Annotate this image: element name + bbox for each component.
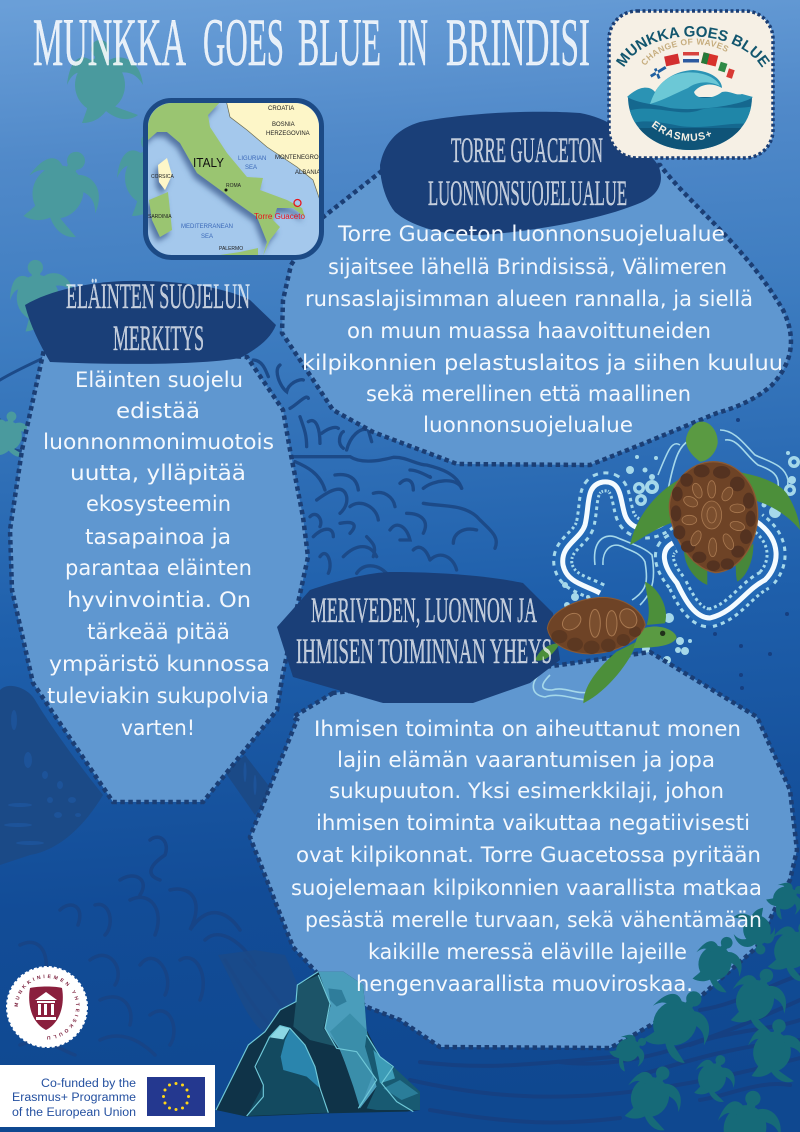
flippers	[630, 479, 680, 545]
background wave pattern	[253, 360, 496, 573]
text: ELÄINTEN SUOJELUN	[66, 276, 250, 316]
logo: Munkka Goes Blue badge: ERASMUS+	[652, 120, 712, 142]
map of Italy: MONTENEGRO	[275, 155, 319, 161]
heading blob: Eläinten suojelun	[25, 281, 276, 364]
text block: Ihmisen toiminta: hengenvaarallista muoviroskaa.	[356, 972, 693, 997]
EU co-funding box: of the European Union	[12, 1107, 136, 1119]
text block: Eläinten suojelu: edistää	[116, 399, 200, 424]
heading: Eläinten suojelun merkitys	[66, 276, 250, 358]
panel: Eläinten suojelun background	[10, 345, 308, 802]
text block: Eläinten suojelu: varten!	[121, 716, 195, 741]
text block: Eläinten suojelu: ympäristö kunnossa	[49, 652, 270, 677]
map of Italy: LIGURIAN	[238, 156, 266, 162]
text block: Torre Guaceton: runsaslajisimman alueen rannalla, ja siellä	[305, 287, 753, 312]
turtle silhouettes: upper left	[0, 40, 193, 461]
map of Italy: ALBANIA	[295, 170, 320, 176]
text block: Eläinten suojelu: ekosysteemin	[86, 492, 231, 517]
heading: Eläinten suojelun merkitys: MERKITYS	[113, 318, 204, 358]
logo: Munkka Goes Blue badge: CHANGE OF WAVES	[642, 38, 728, 65]
EU co-funding box	[0, 1065, 215, 1127]
logo: Munkka Goes Blue badge	[607, 9, 775, 160]
title	[33, 4, 590, 80]
panel: Meriveden background	[250, 652, 797, 1048]
map of Italy	[145, 100, 325, 260]
map of Italy: ROMA	[226, 183, 242, 189]
heading: Torre Guaceton	[428, 130, 627, 213]
text block: Torre Guaceton: sekä merellinen että maallinen	[366, 382, 691, 407]
heading: Meriveden, luonnon ja ihmisen toiminnan yhteys	[296, 590, 552, 671]
map of Italy: SEA	[201, 234, 213, 240]
text block: Torre Guaceton: kilpikonnien pelastuslaitos ja siihen kuuluu	[302, 351, 783, 376]
EU flag	[147, 1077, 205, 1116]
small turtle lines over panel	[533, 672, 590, 700]
logo wave	[628, 97, 752, 150]
EU co-funding box: Erasmus+ Programme	[12, 1092, 136, 1104]
map of Italy: SARDINIA	[148, 214, 172, 220]
heading: Meriveden, luonnon ja ihmisen toiminnan yhteys: MERIVEDEN, LUONNON JA	[311, 590, 537, 630]
map of Italy: Torre Guaceto	[254, 212, 306, 221]
decorative aboriginal dot lines	[563, 482, 776, 618]
rock	[216, 972, 420, 1117]
text block: Ihmisen toiminta: suojelemaan kilpikonnien vaarallista matkaa	[291, 876, 762, 901]
map of Italy: SEA	[245, 165, 257, 171]
text block: Torre Guaceton	[302, 222, 783, 438]
heading: Torre Guaceton: TORRE GUACETON	[451, 130, 603, 170]
text block: Ihmisen toiminta: kaikille meressä eläville lajeille	[368, 940, 687, 965]
text block: Eläinten suojelu: tärkeää pitää	[87, 620, 230, 645]
badge: Munkkiniemen yhteiskoulu: MUNKKINIEMEN YHTEISKOULU	[14, 974, 80, 1040]
map of Italy: MEDITERRANEAN	[181, 224, 233, 230]
text block: Torre Guaceton: sijaitsee lähellä Brindisissä, Välimeren	[328, 255, 727, 280]
dot clusters	[530, 451, 800, 673]
logo arc text: MUNKKA GOES BLUE	[616, 26, 770, 68]
text block: Eläinten suojelu: hyvinvointia. On	[67, 588, 251, 613]
EU co-funding box: Co-funded by the	[41, 1078, 136, 1090]
text block: Eläinten suojelu: tuleviakin sukupolvia	[47, 684, 269, 709]
text block: Eläinten suojelu	[43, 368, 274, 741]
text block: Torre Guaceton: luonnonsuojelualue	[423, 413, 633, 438]
rock-side ornament	[218, 950, 300, 1035]
text block: Ihmisen toiminta: ovat kilpikonnat. Torre Guacetossa pyritään	[296, 843, 761, 868]
text block: Ihmisen toiminta: sukupuuton. Yksi esimerkkilaji, johon	[329, 779, 724, 804]
title: IN	[398, 4, 428, 80]
text block: Eläinten suojelu: uutta, ylläpitää	[70, 461, 246, 486]
text: BRINDISI	[446, 4, 590, 80]
panel: Torre Guaceto background	[282, 165, 791, 465]
text block: Ihmisen toiminta	[291, 717, 762, 997]
big turtle	[630, 422, 800, 585]
bottom ornament lines	[410, 975, 800, 1123]
dark flecks	[713, 418, 789, 690]
upper-left wave line	[0, 350, 60, 451]
turtle silhouettes: lower right	[606, 875, 800, 1132]
heading: Meriveden, luonnon ja ihmisen toiminnan yhteys: IHMISEN TOIMINNAN YHEYS	[296, 631, 552, 671]
badge: Munkkiniemen yhteiskoulu	[6, 966, 88, 1048]
text block: Ihmisen toiminta: pesästä merelle turvaan, sekä vähentämään	[305, 908, 762, 933]
crest	[29, 986, 63, 1030]
heading blob: Meriveden	[277, 572, 560, 703]
map of Italy: HERZEGOVINA	[266, 131, 310, 137]
map of Italy: PALERMO	[219, 246, 243, 252]
text block: Torre Guaceton: on muun muassa haavoittuneiden	[347, 319, 711, 344]
text block: Eläinten suojelu: luonnonmonimuotois	[43, 430, 274, 455]
title: GOES	[203, 4, 284, 80]
title: BLUE	[298, 4, 381, 80]
text block: Eläinten suojelu: parantaa eläinten	[65, 556, 252, 581]
title: MUNKKA	[33, 4, 186, 80]
text block: Eläinten suojelu: Eläinten suojelu	[75, 368, 243, 393]
text block: Ihmisen toiminta: lajin elämän vaarantumisen ja jopa	[337, 748, 715, 773]
text block: Eläinten suojelu: tasapainoa ja	[85, 525, 231, 550]
small turtle	[535, 582, 677, 703]
text block: Torre Guaceton: Torre Guaceton luonnonsuojelualue	[337, 222, 725, 247]
map of Italy: CROATIA	[268, 106, 294, 112]
map of Italy: ITALY	[193, 156, 225, 170]
map of Italy: CORSICA	[151, 174, 174, 180]
shell scutes	[671, 465, 756, 571]
text block: Ihmisen toiminta: ihmisen toiminta vaikuttaa negatiivisesti	[316, 811, 750, 836]
map of Italy: BOSNIA	[272, 122, 295, 128]
left ornament band	[0, 686, 272, 865]
text block: Ihmisen toiminta: Ihmisen toiminta on aiheuttanut monen	[314, 717, 741, 742]
logo flags	[650, 52, 735, 79]
heading blob: Torre Guaceton	[380, 112, 661, 235]
